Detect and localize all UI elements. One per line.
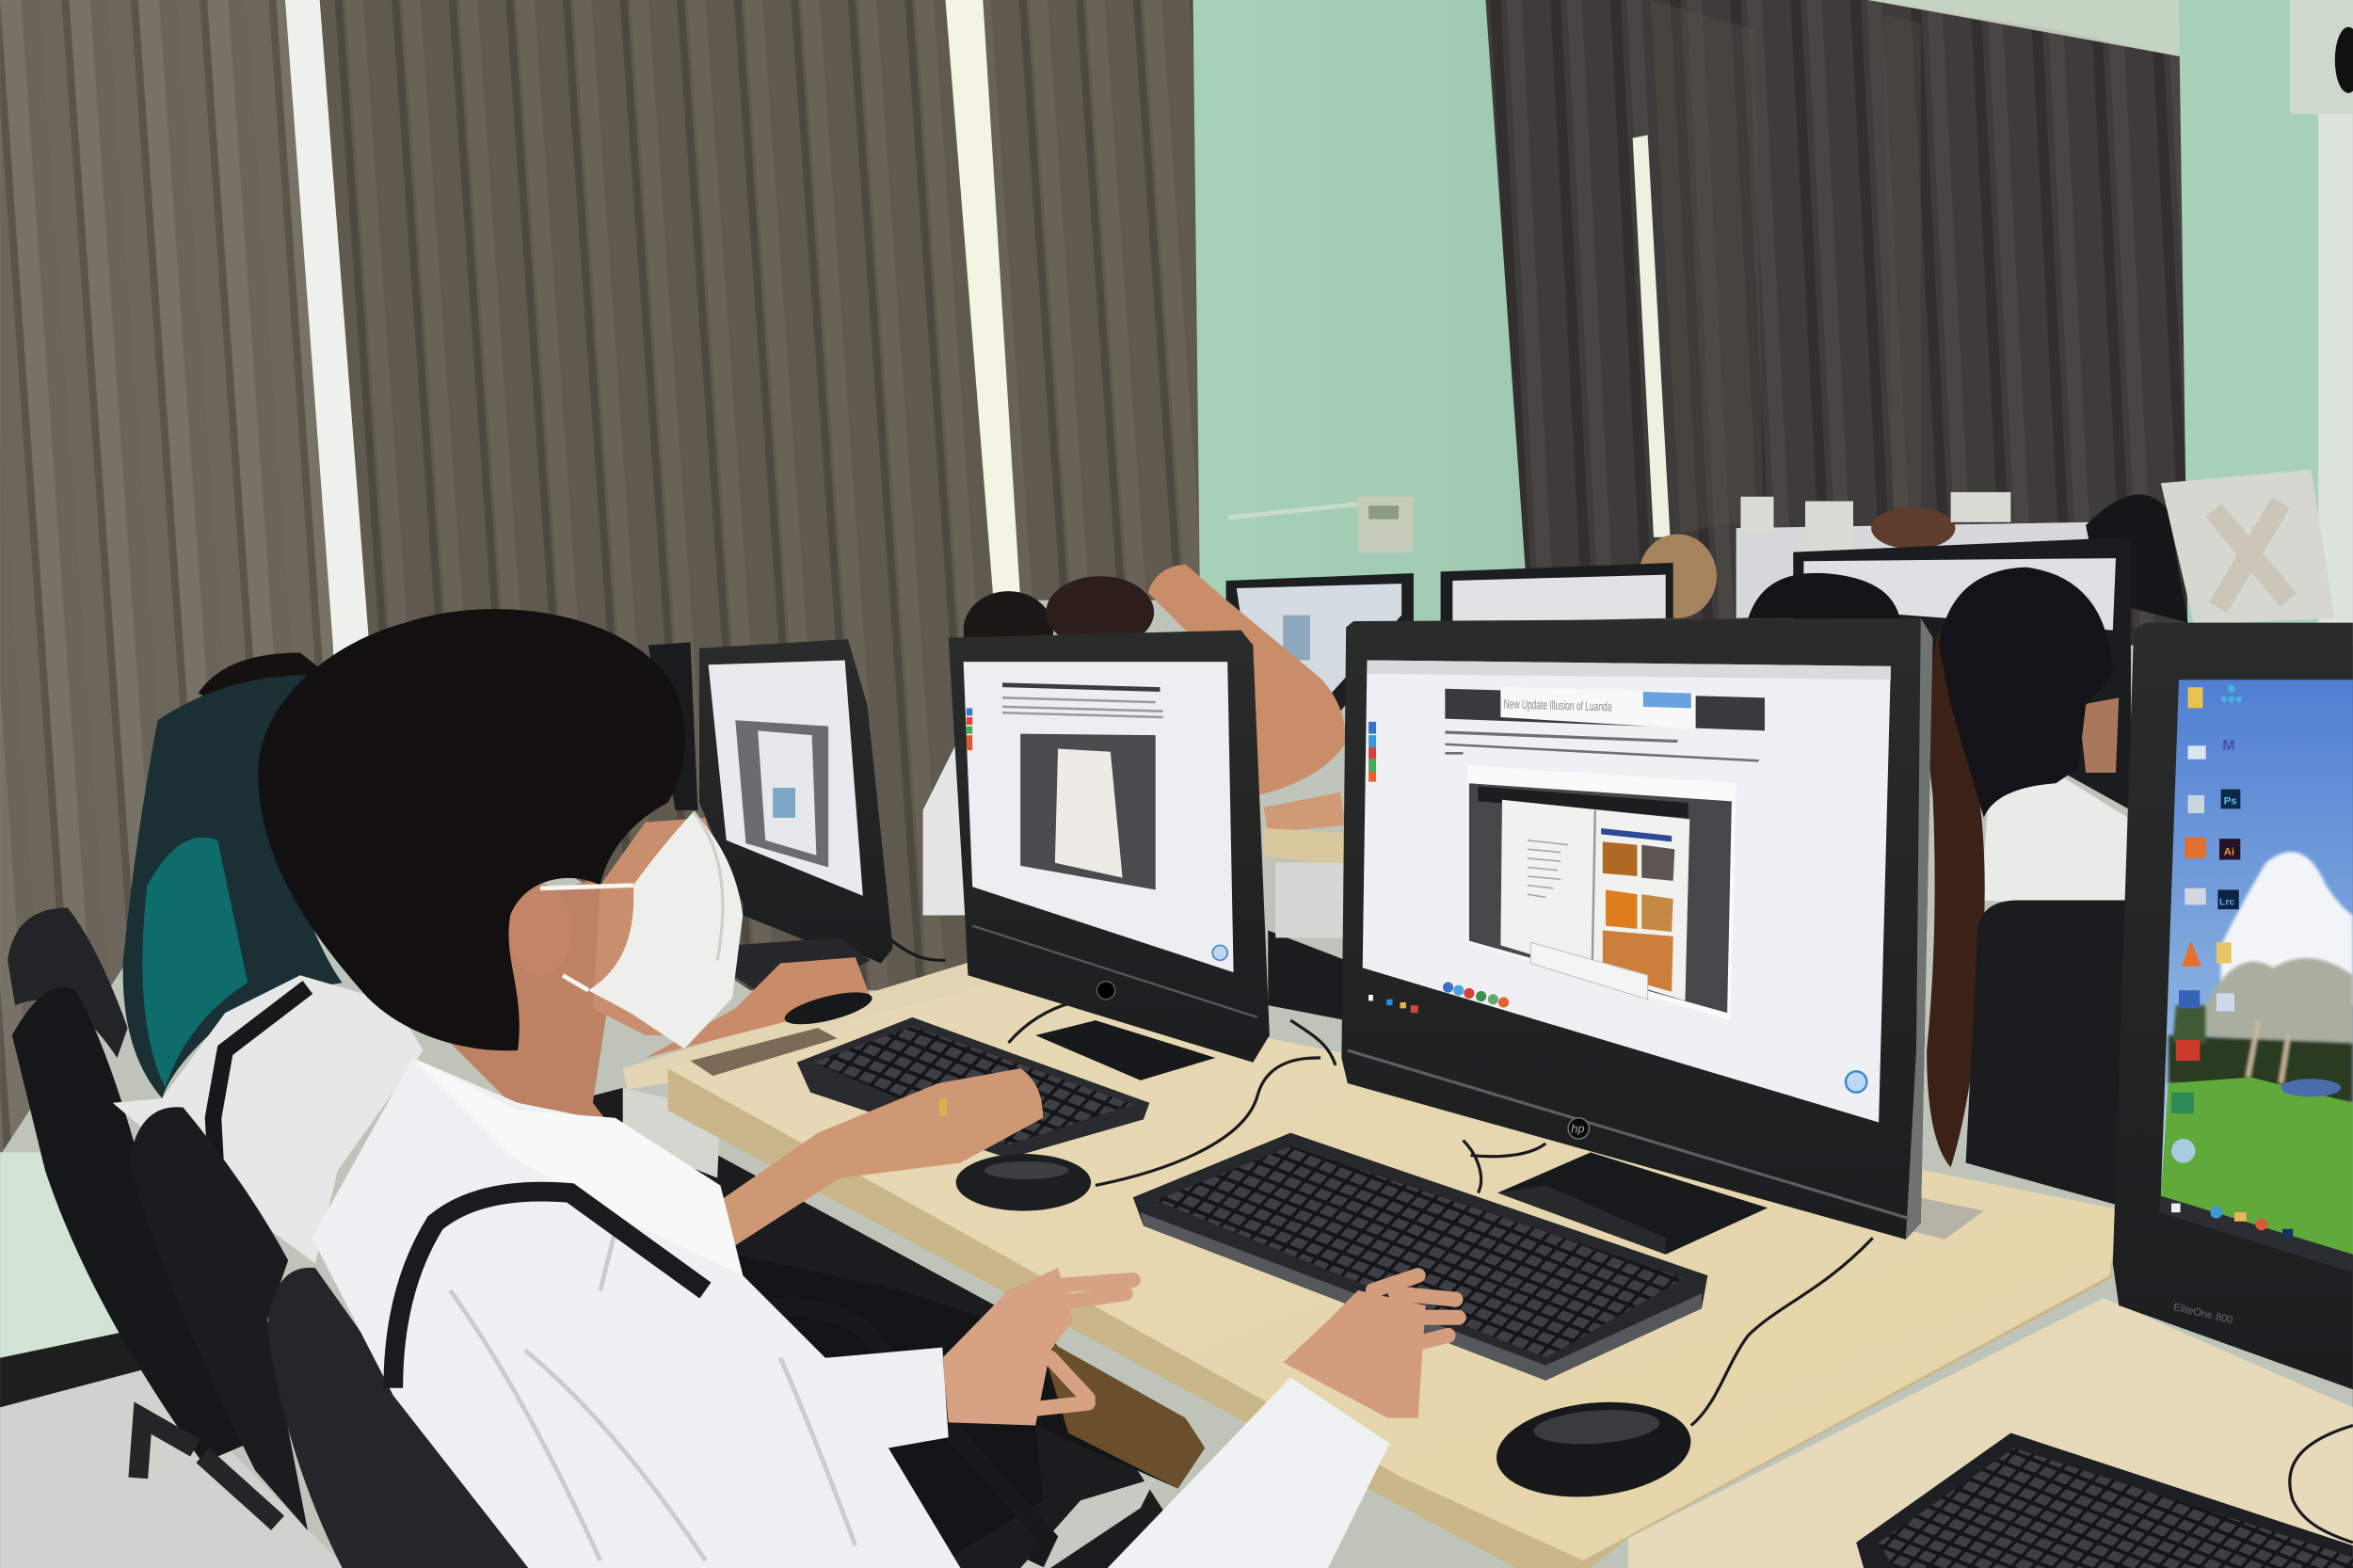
shirt shading bbox=[450, 1200, 856, 1560]
taskbar bbox=[2159, 1196, 2353, 1272]
hp logo bbox=[1097, 982, 1115, 1000]
window light centre bbox=[942, 0, 1035, 600]
monitor 3: left bbox=[648, 639, 893, 1005]
blurred text rows bbox=[1445, 732, 1759, 760]
chair base bbox=[138, 1418, 278, 1523]
back row: computers and people bbox=[923, 492, 2188, 1020]
ponytail bbox=[1927, 631, 1985, 1167]
desk: back row bbox=[623, 960, 1002, 1089]
keyboard: middle bbox=[797, 1017, 1149, 1159]
under desk dark area bbox=[420, 1088, 1201, 1568]
curtain: third panel bbox=[983, 0, 1208, 600]
bag strap bbox=[213, 987, 308, 1200]
chair back bbox=[267, 1268, 528, 1568]
trees bbox=[2169, 958, 2353, 1103]
dark fixture on wall unit bbox=[2335, 27, 2353, 93]
chin highlight bbox=[1348, 1050, 1909, 1219]
floor under desk bbox=[1020, 1478, 1156, 1568]
pillar right bbox=[2179, 0, 2323, 646]
taskbar icons bbox=[1369, 995, 1418, 1013]
shirt torso bbox=[312, 1058, 960, 1568]
ceiling strip bbox=[1868, 0, 2191, 57]
face skin bbox=[2078, 697, 2119, 773]
phone on desk bbox=[690, 1028, 838, 1076]
second student arm bbox=[720, 1068, 1043, 1245]
header dark band bbox=[1445, 689, 1765, 730]
student with teal hair bbox=[113, 653, 424, 1263]
monitor 2: middle bbox=[949, 631, 1270, 1080]
parked car bbox=[2281, 1079, 2341, 1096]
small mouse under hand bbox=[782, 985, 875, 1031]
collar bbox=[413, 1058, 743, 1275]
mouse: middle bbox=[956, 1154, 1091, 1211]
bag strap bbox=[393, 1192, 705, 1388]
neck and back of head skin bbox=[450, 878, 608, 1123]
desk: front right bbox=[1628, 1298, 2353, 1568]
chair: far left bbox=[8, 908, 278, 1523]
green wall column bbox=[1193, 0, 1530, 646]
dark head bbox=[199, 653, 338, 750]
right hand with fingers bbox=[1283, 1275, 1459, 1418]
far right wall bbox=[2318, 0, 2353, 646]
curtain: far left bbox=[0, 0, 333, 1156]
person with ponytail bbox=[1927, 568, 2131, 1208]
black head above monitor C bbox=[1748, 573, 1899, 618]
lower left wall and floor bbox=[0, 1152, 345, 1568]
curtain: second panel bbox=[320, 0, 994, 990]
monitor 1: front bbox=[1341, 618, 1933, 1255]
screen text lines bbox=[1002, 697, 1163, 717]
hp logo bbox=[1568, 1118, 1589, 1139]
small papers bbox=[1740, 492, 2010, 549]
clouds bbox=[2221, 852, 2353, 1020]
social icons bbox=[967, 708, 972, 750]
page header band bbox=[1002, 682, 1160, 692]
back heads bbox=[1639, 494, 2188, 623]
wall thermostat bbox=[1227, 497, 1414, 552]
face bbox=[593, 818, 735, 1035]
desktop icons bbox=[2171, 685, 2242, 1163]
chin lines bbox=[972, 926, 1257, 1017]
back monitor B bbox=[1441, 563, 1673, 623]
desk leg back bbox=[623, 1088, 720, 1177]
cables bbox=[888, 937, 2353, 1543]
chair back bbox=[1966, 901, 2128, 1208]
front student bbox=[258, 609, 1459, 1568]
desk: main row bbox=[668, 983, 2119, 1568]
embedded document frame bbox=[1467, 765, 1737, 1020]
back desk right of monitor 2 bbox=[1263, 828, 1346, 867]
share icons row bbox=[1443, 982, 1509, 1008]
grommet on desk bbox=[1909, 1196, 1984, 1240]
face mask bbox=[540, 811, 743, 1048]
mouse: front bbox=[1492, 1393, 1695, 1506]
keyboard: front bbox=[1133, 1133, 1707, 1381]
body bbox=[949, 631, 1270, 1063]
body bbox=[2113, 623, 2353, 1389]
dark curtain bbox=[1485, 0, 2188, 646]
monitor 4: right with desktop wallpaper bbox=[2113, 623, 2353, 1389]
teal hair bbox=[123, 675, 343, 1098]
keyboard: right bottom bbox=[1856, 1433, 2353, 1568]
desktop icons: Ai bbox=[2224, 847, 2234, 858]
popup bbox=[1500, 687, 1696, 729]
screen bbox=[964, 662, 1234, 972]
desktop icons: M bbox=[2222, 738, 2234, 754]
ring on finger bbox=[939, 1098, 947, 1116]
stand bbox=[1035, 1020, 1215, 1080]
right sleeve bbox=[1108, 1378, 1389, 1568]
screen bbox=[1363, 660, 1891, 1123]
open book bbox=[1500, 800, 1689, 1000]
taskbar icons bbox=[2171, 1204, 2293, 1240]
back white monitors bbox=[1737, 522, 2131, 618]
sky bbox=[2161, 680, 2353, 1257]
trousers and front leg bbox=[728, 1253, 1201, 1560]
desk support bbox=[1275, 863, 1346, 937]
popup button bbox=[1643, 692, 1691, 708]
ad overlay box bbox=[1530, 942, 1648, 1000]
desktop icons: Lrc bbox=[2219, 897, 2234, 907]
light gap in dark curtain bbox=[1633, 135, 1671, 537]
person behind with raised arm bbox=[923, 564, 1346, 915]
body bbox=[1341, 618, 1933, 1240]
back monitor A bbox=[1226, 573, 1414, 735]
wall unit top right bbox=[2290, 0, 2353, 114]
curtain lighter bands bbox=[1651, 0, 1921, 533]
baseboard bbox=[0, 1328, 147, 1407]
page preview bbox=[1055, 749, 1123, 878]
window light left bbox=[282, 0, 372, 660]
back monitor C bbox=[1793, 537, 2131, 810]
chair: middle bbox=[129, 1107, 308, 1530]
hair bbox=[258, 609, 685, 1050]
chat button bbox=[1846, 1071, 1866, 1093]
stand bbox=[1497, 1152, 1768, 1255]
head bbox=[1939, 568, 2113, 818]
dark bag behind desk bbox=[1268, 930, 1346, 1020]
pale wall bbox=[0, 1152, 143, 1358]
document preview bbox=[1020, 734, 1156, 889]
paper stand with x mark bbox=[2161, 470, 2335, 624]
viewer toolbar bbox=[1478, 786, 1689, 818]
hp logo: hp bbox=[1571, 1122, 1584, 1136]
chat button bbox=[1212, 945, 1227, 960]
floor bbox=[0, 1368, 345, 1568]
desktop icons: Ps bbox=[2224, 796, 2236, 808]
chair arm rest bbox=[735, 1307, 1048, 1563]
orange photos bbox=[1603, 841, 1674, 992]
model label: EliteOne 800 bbox=[2172, 1302, 2233, 1326]
book blue banner bbox=[1601, 828, 1672, 841]
ear bbox=[509, 884, 572, 977]
leg in tan bbox=[1038, 1336, 1205, 1489]
left hand with fingers bbox=[942, 1268, 1133, 1426]
popup title: New Update Illusion of Luanda bbox=[1503, 696, 1612, 714]
lawn bbox=[2161, 1078, 2353, 1257]
book gutter bbox=[1593, 810, 1595, 972]
third student's hand bbox=[646, 957, 871, 1058]
tab strip bbox=[1367, 660, 1891, 680]
book contents lines bbox=[1528, 840, 1568, 897]
silver side edge bbox=[1906, 618, 1933, 1240]
left social bar bbox=[1369, 722, 1376, 782]
shirt bbox=[113, 975, 424, 1263]
embedded dark viewer bbox=[1469, 783, 1732, 1013]
shirt bbox=[1981, 773, 2131, 908]
